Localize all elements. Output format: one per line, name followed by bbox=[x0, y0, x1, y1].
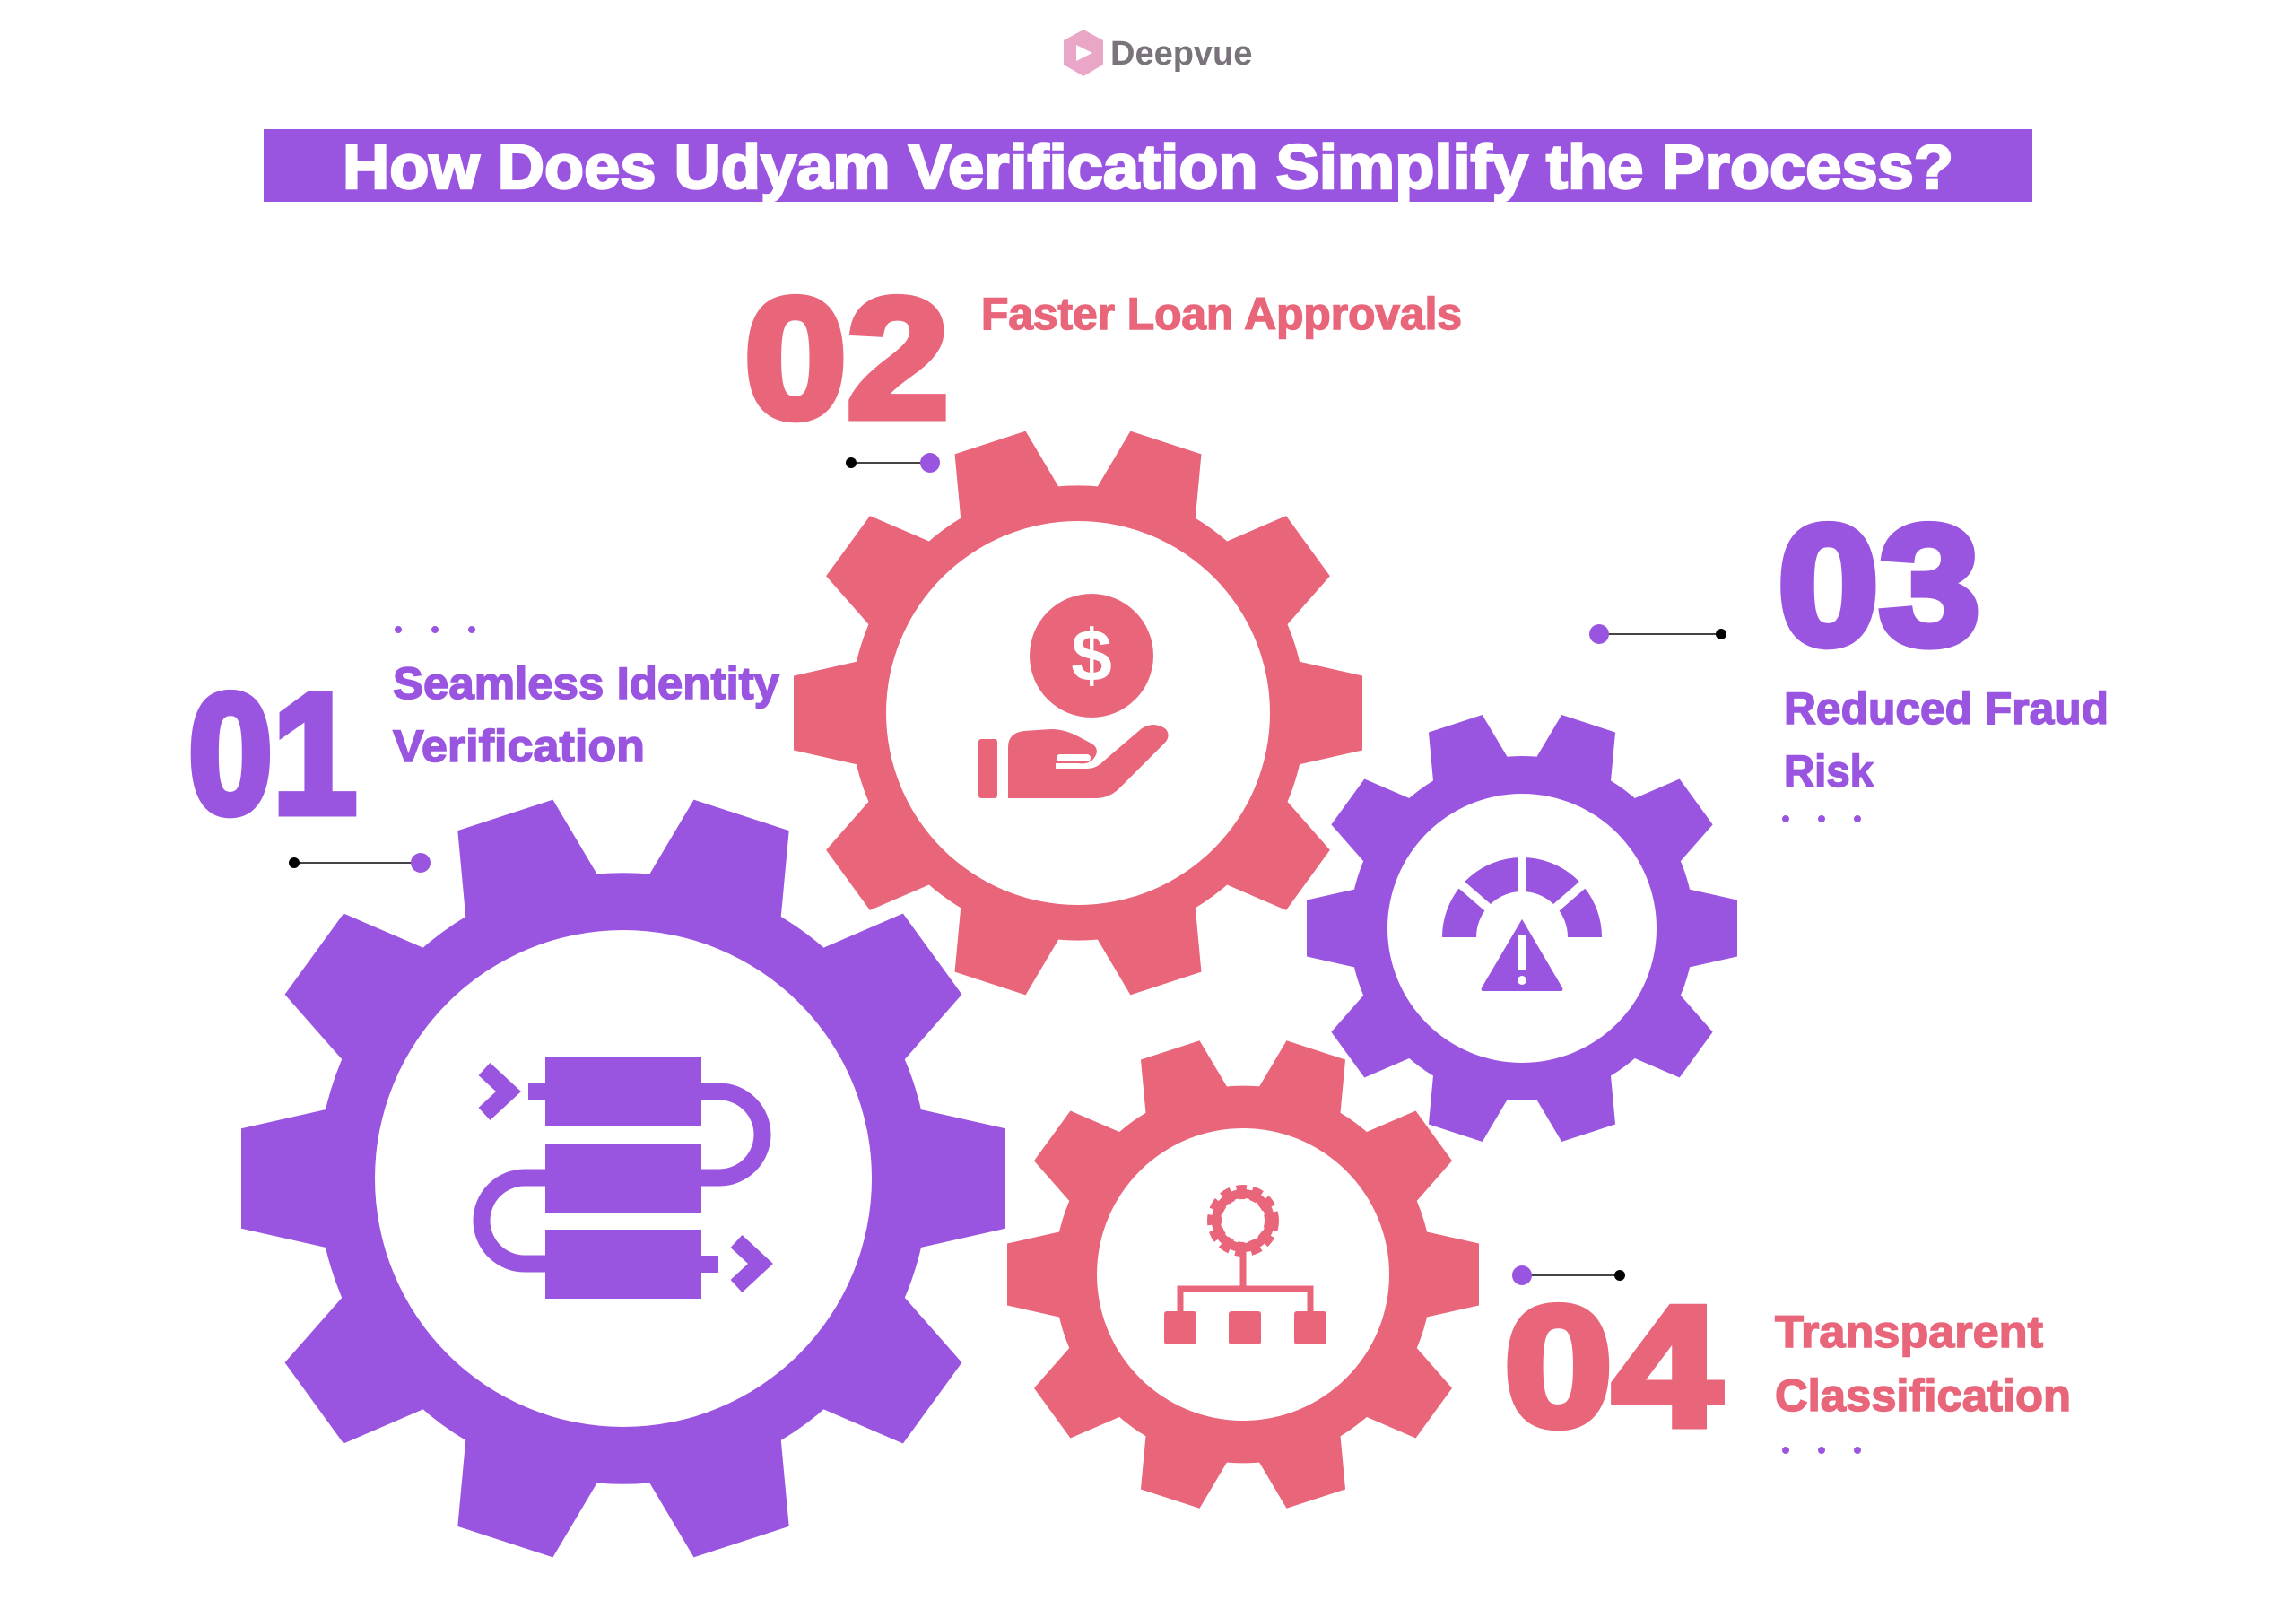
item 04: Classification bbox=[1775, 1370, 2071, 1421]
title bar: How Does Udyam Verification Simplify the Process? bbox=[343, 132, 1953, 202]
gear 1: purple large bbox=[241, 793, 1005, 1564]
item 04 bbox=[1504, 1265, 2071, 1462]
item 03: 03 bbox=[1778, 491, 1980, 681]
icon: process flow bbox=[482, 1057, 762, 1299]
item 01: Verification bbox=[393, 721, 645, 771]
item 03 bbox=[1589, 491, 2109, 822]
gear 3: purple bbox=[1307, 711, 1737, 1145]
item 04: Transparent bbox=[1775, 1307, 2043, 1357]
gear 2: pink bbox=[794, 426, 1362, 1000]
item 03: Reduced Fraud bbox=[1784, 683, 2109, 734]
item 02: 02 bbox=[744, 264, 949, 454]
item 04: 04 bbox=[1504, 1272, 1721, 1462]
logo: Deepvue bbox=[1110, 35, 1252, 73]
item 03: Risk bbox=[1784, 746, 1874, 796]
item 02 bbox=[744, 264, 1462, 473]
item 01 bbox=[188, 626, 779, 873]
logo bbox=[1064, 30, 1252, 76]
icon: money hand bbox=[978, 594, 1169, 798]
item 02: Faster Loan Approvals bbox=[981, 289, 1462, 339]
gear 4: pink bbox=[1007, 1037, 1479, 1512]
item 01: 01 bbox=[188, 659, 357, 849]
icon: fraud gauge warning bbox=[1455, 848, 1589, 996]
item 01: Seamless Identity bbox=[393, 658, 779, 709]
icon: hierarchy bbox=[1164, 1192, 1326, 1344]
icon: money hand: $ bbox=[1071, 615, 1112, 697]
